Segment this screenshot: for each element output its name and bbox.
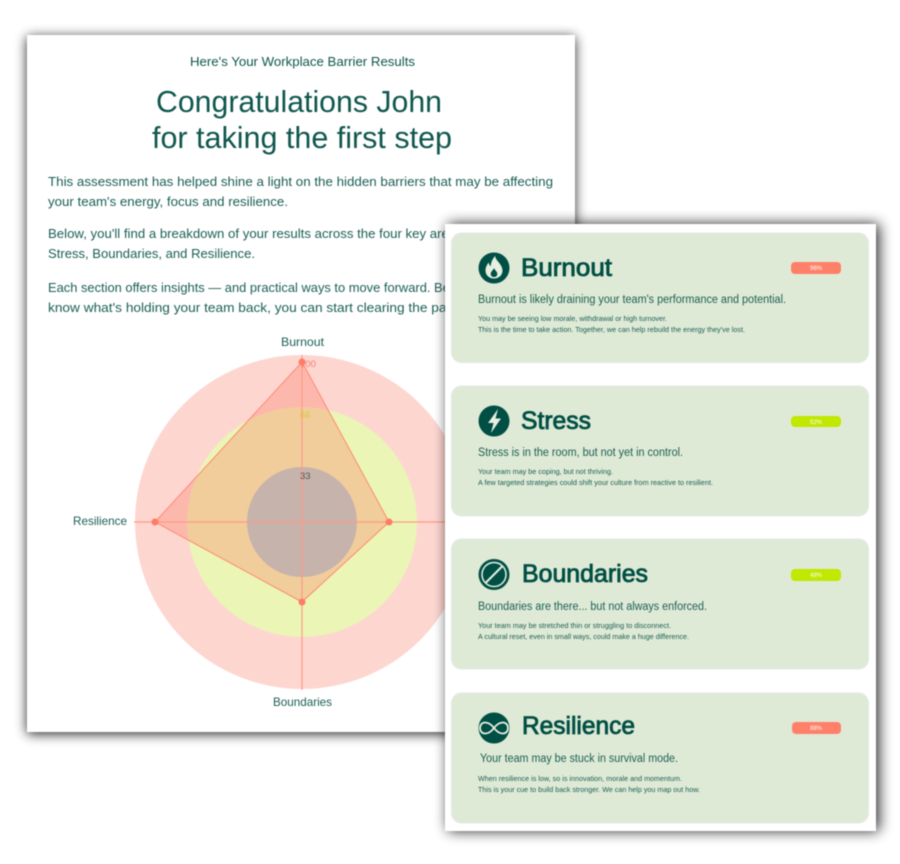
heading: Boundaries xyxy=(522,560,648,588)
scale labels xyxy=(300,359,316,482)
detail: A cultural reset, even in small ways, could make a huge difference. xyxy=(478,632,689,641)
card: Burnout xyxy=(452,233,868,362)
intro text: Below, you'll find a breakdown of your results across the four key areas: Burnout, xyxy=(48,226,520,241)
axis label: Resilience: Resilience xyxy=(73,514,127,528)
summary: Burnout is likely draining your team's performance and potential. xyxy=(478,294,786,306)
title: for taking the first step xyxy=(152,120,452,155)
detail xyxy=(478,774,700,794)
title xyxy=(152,84,452,155)
score pill: 96% xyxy=(810,266,823,272)
radar chart xyxy=(73,335,470,709)
inner zone xyxy=(247,467,357,577)
detail: Your team may be stretched thin or struggling to disconnect. xyxy=(478,621,671,630)
heading: Stress xyxy=(521,407,591,435)
score pill xyxy=(791,262,841,274)
score pill xyxy=(791,416,841,427)
score pill xyxy=(791,569,841,581)
intro text: Each section offers insights — and practical ways to move forward. Because when you xyxy=(48,280,543,295)
summary: Stress is in the room, but not yet in control. xyxy=(478,447,683,459)
heading: Burnout xyxy=(521,254,612,282)
detail: Your team may be coping, but not thriving. xyxy=(478,467,613,476)
score pill: 48% xyxy=(810,573,823,579)
summary: Your team may be stuck in survival mode. xyxy=(480,753,678,765)
detail xyxy=(478,467,713,487)
data points xyxy=(152,358,392,606)
icon: prohibited sign xyxy=(478,559,510,590)
intro text: Stress, Boundaries, and Resilience. xyxy=(48,246,255,261)
intro text: know what's holding your team back, you can start clearing the path forward. xyxy=(48,300,511,315)
intro text xyxy=(48,174,553,315)
scale labels: 100 xyxy=(300,359,316,370)
axis label: Boundaries: Boundaries xyxy=(273,695,332,709)
detail: This is your cue to build back stronger. We can help you map out how. xyxy=(478,785,700,794)
detail: When resilience is low, so is innovation, morale and momentum. xyxy=(478,774,682,783)
card: Stress xyxy=(452,386,868,516)
icon: lightning bolt xyxy=(478,406,510,436)
icon: infinity xyxy=(478,712,510,744)
score polygon xyxy=(155,362,389,602)
scale labels: 66 xyxy=(300,410,311,421)
detail xyxy=(478,621,689,641)
middle zone xyxy=(187,407,417,637)
summary: Boundaries are there... but not always enforced. xyxy=(478,601,707,613)
score pill xyxy=(792,722,841,734)
intro text: This assessment has helped shine a light on the hidden barriers that may be affecting xyxy=(48,174,553,189)
detail xyxy=(478,314,745,334)
eyebrow: Here's Your Workplace Barrier Results xyxy=(190,55,415,69)
heading: Resilience xyxy=(522,712,635,740)
outer zone xyxy=(135,355,469,689)
intro text: your team's energy, focus and resilience. xyxy=(48,194,288,209)
scale labels: 33 xyxy=(300,471,311,482)
detail: A few targeted strategies could shift your culture from reactive to resilient. xyxy=(478,478,713,487)
icon: flame xyxy=(478,252,510,284)
card: Boundaries xyxy=(452,539,868,669)
panel: results letter xyxy=(27,35,575,732)
detail: This is the time to take action. Together, we can help rebuild the energy they've lost. xyxy=(478,325,745,334)
title: Congratulations John xyxy=(156,84,442,119)
score pill: 88% xyxy=(810,726,823,732)
score pill: 52% xyxy=(810,420,823,426)
card: Resilience xyxy=(452,693,868,823)
axis label: Burnout: Burnout xyxy=(281,335,325,349)
panel: result cards xyxy=(445,224,876,831)
detail: You may be seeing low morale, withdrawal or high turnover. xyxy=(478,314,667,323)
